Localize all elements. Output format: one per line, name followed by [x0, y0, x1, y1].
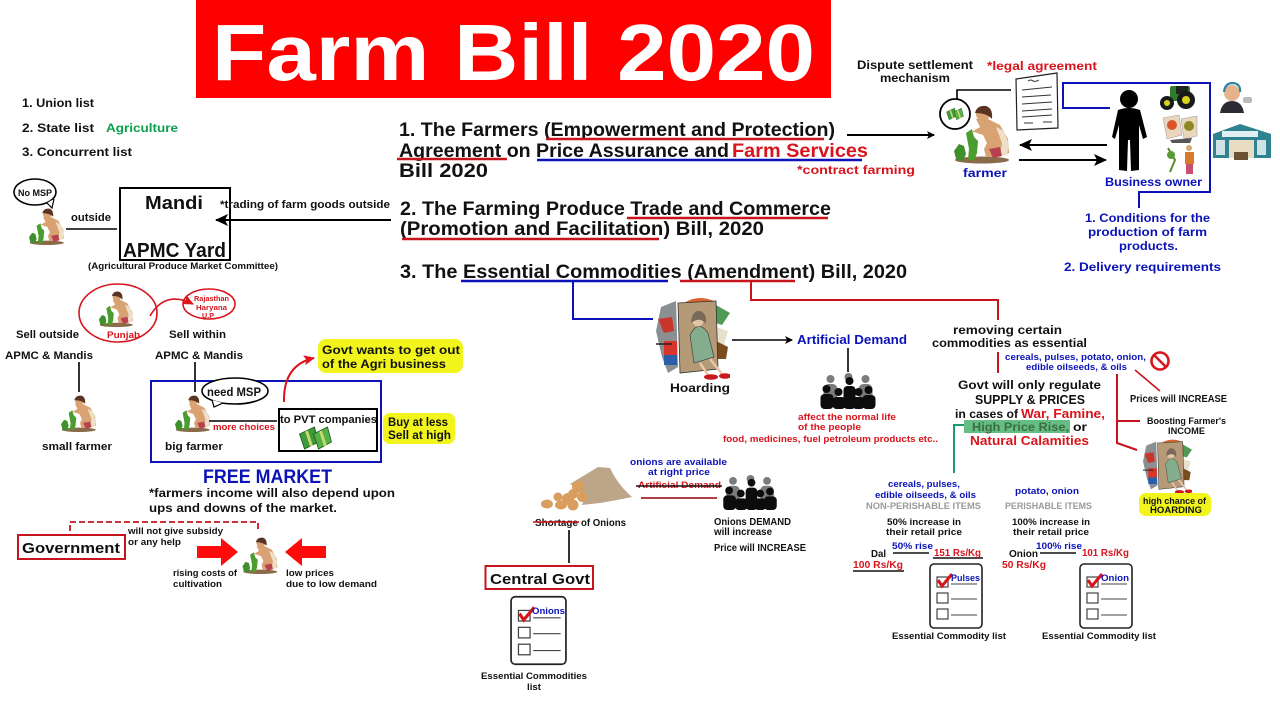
icon: big farmer [175, 396, 210, 432]
checklist: onion: Onion [1101, 573, 1129, 584]
removing label: removing certain [953, 323, 1062, 337]
callout: high chance of hoarding: HOARDING [1150, 505, 1202, 516]
removed commodities: cereals, pulses, potato, onion, [1005, 352, 1146, 363]
title banner: Farm Bill 2020 [212, 8, 815, 97]
mandi box: APMC Yard [123, 240, 226, 262]
normal life effects: food, medicines, fuel petroleum products etc.. [723, 434, 938, 445]
callout: govt wants out [318, 339, 463, 373]
dal price example: 50% rise [892, 541, 933, 552]
dispute settlement label [857, 60, 973, 85]
arrow: owner to farmer [1020, 144, 1107, 146]
non-perishable items text: 50% increase in [887, 517, 961, 528]
other states circle [183, 289, 235, 320]
callout: buy sell: Buy at less [388, 417, 448, 429]
sell within label: APMC & Mandis [155, 350, 243, 362]
normal life effects: of the people [798, 422, 861, 433]
bill 2 heading: 2. The Farming Produce Trade and Commerce [400, 199, 831, 220]
non-perishable items text: NON-PERISHABLE ITEMS [866, 501, 981, 512]
callout: buy sell: Sell at high [388, 430, 451, 442]
list of constitutional lists: 3. Concurrent list [22, 145, 132, 159]
bill 1 heading: Agreement on Price Assurance and [399, 141, 729, 162]
sell outside label: APMC & Mandis [5, 350, 93, 362]
icon: crowd [723, 475, 777, 510]
onion price example: 100% rise [1036, 541, 1082, 552]
onions demand text: will increase [713, 527, 772, 538]
perishable items text: 100% increase in [1012, 517, 1090, 528]
government panel [18, 522, 377, 590]
central govt box [486, 566, 593, 589]
callout: govt wants out: Govt wants to get out [322, 343, 460, 357]
arrow: farmer to owner [1019, 159, 1106, 161]
boosting income label [1147, 416, 1226, 437]
sell within label: Sell within [169, 329, 226, 341]
govt regulate text: Govt will only regulate [958, 378, 1101, 392]
other states circle: U.P [202, 311, 214, 320]
other states circle: Rajasthan [194, 294, 229, 303]
checklist: pulses: Pulses [951, 573, 980, 584]
dal price example [853, 541, 983, 571]
essential commodity label: Essential Commodity list [1042, 631, 1157, 642]
prices increase label: Prices will INCREASE [1130, 394, 1227, 405]
rising costs label: cultivation [173, 579, 222, 590]
free market heading: FREE MARKET [203, 467, 332, 488]
checklist: pulses [930, 564, 982, 628]
govt regulate text: War, Famine, [1021, 407, 1105, 421]
no MSP bubble: No MSP [18, 188, 53, 199]
non-perishable items text: edible oilseeds, & oils [875, 490, 976, 501]
govt regulate text [955, 378, 1105, 448]
private companies box: to PVT companies [280, 414, 377, 426]
removed commodities [1005, 352, 1146, 373]
non-perishable items text: their retail price [886, 527, 962, 538]
bill 2 heading [400, 199, 831, 240]
conditions text: 1. Conditions for the [1085, 211, 1210, 225]
need MSP bubble [202, 378, 268, 407]
essential commodities label: list [527, 682, 542, 693]
punjab circle [79, 284, 157, 342]
no MSP bubble [14, 179, 56, 208]
list of constitutional lists: 1. Union list [22, 96, 94, 110]
onion price example [1002, 541, 1129, 571]
bill 1 heading: Bill 2020 [399, 161, 488, 182]
onions demand text: Price will INCREASE [714, 543, 806, 554]
onion example panel [481, 457, 806, 693]
APMC full name: (Agricultural Produce Market Committee) [88, 261, 278, 271]
trading label: *trading of farm goods outside [220, 199, 390, 211]
icon: money circle [940, 90, 1011, 129]
business owner label: Business owner [1105, 175, 1202, 189]
govt regulate text: High Price Rise, [972, 420, 1069, 434]
normal life effects [723, 412, 938, 445]
sell outside label: Sell outside [16, 329, 79, 341]
icon: legal document [1016, 73, 1058, 130]
removal of commodities panel [751, 281, 1227, 516]
onion price example: Onion [1009, 549, 1038, 560]
non-perishable items text: cereals, pulses, [888, 479, 960, 490]
callout: buy sell [383, 413, 455, 444]
icon: small farmer [61, 396, 96, 432]
bill 1 heading [397, 120, 868, 182]
low prices label: due to low demand [286, 579, 377, 590]
arrow: rising costs [197, 538, 238, 566]
conditions text: 2. Delivery requirements [1064, 260, 1221, 274]
conditions text: products. [1119, 239, 1178, 253]
arrow: punjab to other states [150, 299, 193, 316]
boosting income label: INCOME [1168, 426, 1205, 437]
shortage of onions label: Shortage [535, 517, 578, 529]
shortage of onions label [533, 517, 626, 529]
other states circle: Haryana [196, 303, 228, 312]
icon: support agent [1220, 83, 1252, 113]
arrow: bill 2 to mandi [216, 219, 391, 221]
small farmer label: small farmer [42, 441, 113, 453]
bill 2 heading: (Promotion and Facilitation) Bill, 2020 [400, 219, 764, 240]
icon: crowd [820, 373, 876, 409]
icon: farmer [954, 106, 1009, 164]
non-perishable items text [866, 479, 981, 538]
government box: Government [22, 540, 120, 557]
icon: gardener [1167, 145, 1194, 174]
dal price example: 151 Rs/Kg [934, 548, 981, 559]
onions available note: onions are available [630, 457, 727, 468]
list of constitutional lists [22, 96, 178, 159]
mandi box [120, 188, 230, 262]
no subsidy label: or any help [128, 537, 181, 548]
central govt box: Central Govt [490, 571, 590, 588]
onions demand text [713, 517, 806, 554]
government box [18, 535, 125, 559]
hoarding panel [573, 281, 938, 445]
checklist: onions [511, 597, 566, 664]
icon: hoarder [656, 298, 731, 380]
sell within label [155, 329, 243, 362]
govt regulate text: Natural Calamities [970, 434, 1089, 448]
dispute settlement label: mechanism [880, 73, 950, 85]
shortage of onions label: of Onions [581, 517, 626, 529]
list of constitutional lists: Agriculture [106, 121, 178, 135]
arrow: to govt callout [284, 358, 314, 402]
sell outside label [5, 329, 93, 362]
perishable items text: PERISHABLE ITEMS [1005, 501, 1092, 512]
onions available note [630, 457, 727, 498]
perishable items text: their retail price [1013, 527, 1089, 538]
icon: tractor [1160, 86, 1195, 110]
punjab circle: Punjab [107, 330, 140, 341]
onions available note: Artificial Demand [638, 480, 721, 491]
non-perishable panel [853, 479, 1007, 642]
rising costs label [173, 568, 238, 590]
outside label: outside [71, 212, 111, 224]
dispute settlement label: Dispute settlement [857, 60, 973, 72]
dal price example: Dal [871, 549, 886, 560]
normal life effects: affect the normal life [798, 412, 896, 423]
hoarding label: Hoarding [670, 381, 730, 395]
dal price example: 100 Rs/Kg [853, 560, 903, 571]
mandi box: Mandi [145, 193, 203, 213]
callout: high chance of hoarding: high chance of [1143, 496, 1207, 507]
checklist: onion [1080, 564, 1132, 628]
govt regulate text: or [1073, 420, 1087, 434]
more choices label: more choices [213, 422, 275, 433]
perishable panel [1002, 486, 1157, 642]
onion price example: 50 Rs/Kg [1002, 560, 1046, 571]
essential commodities label [481, 671, 587, 693]
onions available note: at right price [648, 467, 710, 478]
free market note [149, 486, 395, 515]
need MSP bubble: need MSP [207, 387, 261, 399]
icon: business owner [1112, 90, 1147, 171]
rising costs label: rising costs of [173, 568, 238, 579]
icon: hoarder [1143, 440, 1193, 494]
icon: farmer squeezed [243, 538, 277, 574]
low prices label [286, 568, 377, 590]
onions demand text: Onions DEMAND [714, 517, 791, 528]
free market note: *farmers income will also depend upon [149, 486, 395, 500]
low prices label: low prices [286, 568, 334, 579]
private companies box [279, 409, 377, 451]
icon: warehouse [1213, 124, 1271, 160]
icon: farmer outside mandi [29, 209, 64, 245]
artificial demand label: Artificial Demand [797, 333, 907, 347]
icon: onion sack [541, 467, 632, 510]
essential commodities label: Essential Commodities [481, 671, 587, 682]
boosting income label: Boosting Farmer's [1147, 416, 1226, 427]
contract farming panel [857, 59, 1271, 274]
mandi panel [14, 179, 391, 271]
bill 1 heading: Farm Services [732, 141, 868, 162]
removing label [932, 323, 1087, 350]
govt regulate text: in cases of [955, 407, 1019, 421]
removed commodities: edible oilseeds, & oils [1026, 362, 1127, 373]
big farmer label: big farmer [165, 441, 224, 453]
no subsidy label [127, 526, 224, 548]
business owner bracket [1063, 83, 1210, 208]
conditions text: production of farm [1088, 225, 1207, 239]
perishable items text [1005, 486, 1092, 538]
icon: prohibited sign [1152, 352, 1168, 370]
small vs big farmer panel [5, 284, 463, 515]
list of constitutional lists: 2. State list [22, 121, 94, 135]
arrow: hoarding to artificial demand [732, 339, 792, 341]
perishable items text: potato, onion [1015, 486, 1079, 497]
free market box [151, 381, 381, 462]
onion price example: 101 Rs/Kg [1082, 548, 1129, 559]
bill 1 heading: 1. The Farmers (Empowerment and Protection) [399, 120, 835, 141]
no subsidy label: will not give subsidy [127, 526, 224, 537]
conditions text [1064, 211, 1221, 274]
free market note: ups and downs of the market. [149, 501, 337, 515]
farmer label: farmer [963, 166, 1007, 180]
bill 3 heading: 3. The Essential Commodities (Amendment) Bill, 2020 [400, 262, 907, 283]
arrow: low prices [285, 538, 326, 566]
govt regulate text: SUPPLY & PRICES [975, 393, 1085, 407]
contract farming note: *contract farming [797, 165, 915, 177]
legal agreement label: *legal agreement [987, 59, 1097, 73]
removing label: commodities as essential [932, 336, 1087, 350]
icon: seed packets [1163, 115, 1197, 143]
checklist: onions: Onions [532, 606, 565, 617]
callout: govt wants out: of the Agri business [322, 357, 446, 371]
callout: high chance of hoarding [1139, 493, 1211, 516]
arrow: bill 1 to farmer [847, 134, 934, 136]
essential commodity label: Essential Commodity list [892, 631, 1007, 642]
